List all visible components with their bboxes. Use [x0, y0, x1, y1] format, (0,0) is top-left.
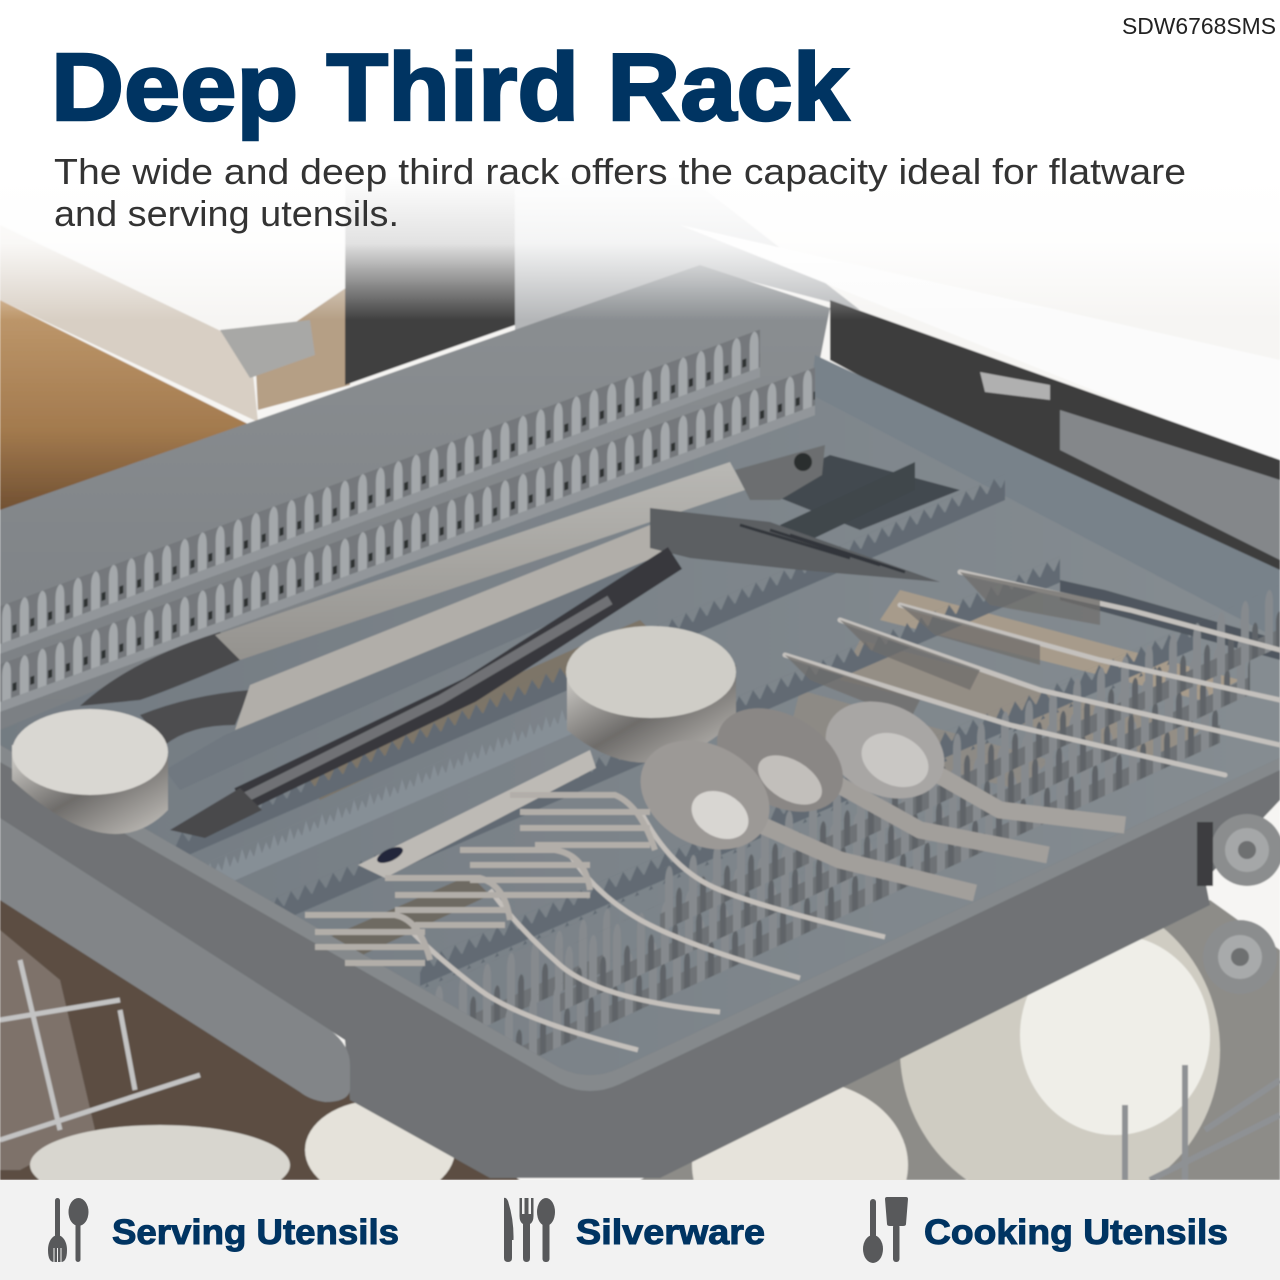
rack: front rim highlight: [0, 745, 1280, 1091]
description: [54, 151, 1186, 234]
utensil: slotted turner: [170, 508, 940, 838]
rack: front wall: [0, 745, 1280, 1178]
back wall tines: [0, 329, 815, 712]
icon: serving utensils: [48, 1198, 88, 1262]
legend label: serving utensils: Serving Utensils: [112, 1213, 399, 1252]
icon: cooking utensils: [863, 1197, 908, 1263]
wheels: [1197, 814, 1280, 994]
utensil: spoons: [621, 683, 1125, 893]
floor saw-tooth rows: [175, 462, 1280, 990]
model number: SDW6768SMS: [1122, 13, 1276, 39]
utensil: tongs: [80, 445, 825, 790]
floor spike tines: [430, 585, 1280, 1074]
legend label: cooking utensils: Cooking Utensils: [924, 1213, 1228, 1252]
title: Deep Third Rack: [51, 34, 850, 141]
icon: silverware: [504, 1198, 555, 1262]
utensil: knives: [785, 572, 1280, 775]
rack: right wall: [810, 355, 1280, 660]
rack: back wall: [0, 265, 830, 735]
rack: floor: [0, 395, 1280, 1110]
rack: front handle bar: [0, 818, 350, 1102]
top white fade: [0, 0, 1280, 320]
floor reflections: [300, 455, 1240, 975]
utensil: forks: [305, 795, 885, 1050]
lower rack and dishes: [0, 880, 1280, 1250]
bottom legend band: [0, 1180, 1280, 1280]
utensil: measuring cups: [12, 626, 736, 878]
description: The wide and deep third rack offers the capacity ideal for flatware: [54, 151, 1186, 192]
legend label: silverware: Silverware: [576, 1213, 765, 1252]
description: and serving utensils.: [54, 193, 399, 234]
